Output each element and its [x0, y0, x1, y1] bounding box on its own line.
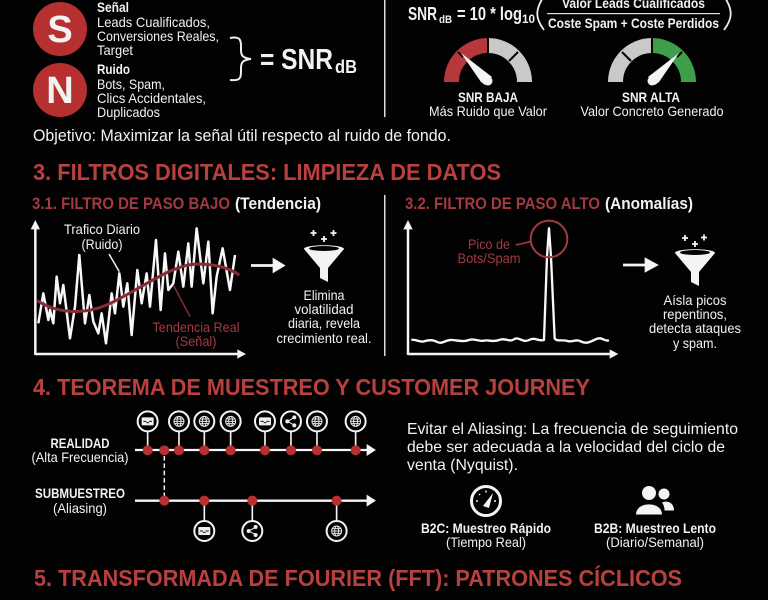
formula: dB — [439, 14, 452, 26]
gauge label: low SNR: SNR BAJA — [458, 89, 518, 105]
formula: 10 — [522, 12, 535, 26]
text: avoid aliasing: venta (Nyquist). — [407, 457, 518, 474]
icon: signal S circle: S — [47, 9, 73, 51]
formula: SNR — [408, 4, 437, 24]
chart: low-pass filter: Trafico Diario — [64, 221, 140, 237]
text: avoid aliasing: debe ser adecuada a la velocidad del ciclo de — [407, 439, 725, 456]
gauge label: low SNR — [429, 89, 547, 119]
text block: noise — [97, 61, 206, 120]
label: B2C: B2C: Muestreo Rápido — [421, 520, 551, 536]
label: undersampling — [35, 485, 125, 516]
timeline: undersampling — [135, 456, 376, 541]
label: B2C: (Tiempo Real) — [446, 534, 526, 550]
gauge: high SNR — [616, 36, 688, 86]
chart: high-pass filter — [403, 220, 618, 359]
heading: section 5: 5. TRANSFORMADA DE FOURIER (FFT): PATRONES CÍCLICOS — [34, 564, 682, 591]
formula: Coste Spam + Coste Perdidos — [548, 15, 719, 31]
label: reality: (Alta Frecuencia) — [32, 449, 128, 465]
text: avoid aliasing — [407, 421, 738, 474]
label: B2B — [594, 520, 716, 550]
label: B2B: B2B: Muestreo Lento — [594, 520, 716, 536]
gauge label: low SNR: Más Ruido que Valor — [429, 103, 547, 119]
chart: high-pass filter: Pico de — [468, 236, 510, 252]
subheading: 3.1: 3.1. FILTRO DE PASO BAJO — [32, 194, 230, 213]
chart: low-pass filter: (Ruido) — [82, 236, 122, 252]
label: reality — [32, 435, 128, 465]
text block: signal: Conversiones Reales, — [97, 28, 219, 44]
text block: noise: Bots, Spam, — [97, 76, 165, 92]
text block: noise: Clics Accidentales, — [97, 90, 206, 106]
gauge label: high SNR — [580, 89, 724, 119]
subheading: 3.1: (Tendencia) — [235, 194, 321, 213]
label: B2C — [421, 520, 551, 550]
subheading: 3.2: (Anomalías) — [605, 194, 693, 213]
objective text: Objetivo: Maximizar la señal útil respecto al ruido de fondo. — [33, 126, 451, 145]
text: low-pass description: diaria, revela — [288, 315, 360, 331]
icon: funnel high-pass — [675, 234, 715, 286]
highlight: spike circle — [531, 221, 567, 257]
text: low-pass description: crecimiento real. — [276, 330, 372, 346]
gauge label: high SNR: SNR ALTA — [622, 89, 680, 105]
text block: noise: Duplicados — [97, 104, 160, 120]
gauge label: high SNR: Valor Concreto Generado — [580, 103, 724, 119]
chart: low-pass filter: (Señal) — [176, 333, 216, 349]
chart: high-pass filter: Bots/Spam — [458, 250, 520, 266]
text: high-pass description: detecta ataques — [649, 320, 741, 336]
divider — [384, 195, 386, 356]
label: undersampling: SUBMUESTREO — [35, 485, 125, 501]
label: reality: REALIDAD — [50, 435, 110, 451]
line: daily traffic noise — [38, 228, 235, 343]
text: low-pass description — [276, 287, 372, 346]
text block: signal — [97, 0, 219, 58]
text block: signal: Leads Cualificados, — [97, 14, 210, 30]
heading: section 3: 3. FILTROS DIGITALES: LIMPIEZA DE DATOS — [33, 159, 501, 185]
text: low-pass description: Elimina — [304, 287, 345, 303]
line: flat traffic with spike — [411, 228, 609, 343]
axes: high-pass — [408, 227, 611, 355]
text: high-pass description: Aísla picos — [664, 292, 726, 308]
chart: low-pass filter: Tendencia Real — [152, 319, 240, 335]
divider — [384, 0, 386, 117]
icon: speedometer — [472, 486, 500, 516]
icon: people — [636, 486, 674, 514]
subheading: 3.2: 3.2. FILTRO DE PASO ALTO — [405, 194, 600, 213]
brace — [230, 37, 251, 80]
label: B2B: (Diario/Semanal) — [606, 534, 704, 550]
formula — [408, 0, 731, 31]
label: undersampling: (Aliasing) — [53, 500, 107, 516]
arrow: high-pass to funnel — [623, 260, 656, 270]
chart: low-pass filter — [31, 220, 246, 359]
text: high-pass description: y spam. — [673, 335, 717, 351]
text: high-pass description: repentinos, — [663, 306, 727, 322]
gauge: low SNR — [452, 36, 524, 86]
formula result: SNR dB: dB — [335, 57, 357, 77]
line: real trend signal — [37, 264, 239, 311]
text: avoid aliasing: Evitar el Aliasing: La frecuencia de seguimiento — [407, 421, 738, 438]
arrow: low-pass to funnel — [251, 260, 283, 271]
icon: noise N circle — [33, 63, 87, 117]
timeline: reality — [135, 411, 376, 456]
text block: noise: Ruido — [97, 61, 130, 77]
icon: signal S circle — [33, 2, 87, 56]
formula: = 10 * log — [457, 4, 522, 24]
icon: noise N circle: N — [46, 70, 74, 112]
heading: section 4: 4. TEOREMA DE MUESTREO Y CUSTOMER JOURNEY — [33, 374, 590, 400]
icon: funnel low-pass — [304, 230, 344, 282]
text: high-pass description — [649, 292, 741, 351]
text: low-pass description: volatilidad — [294, 301, 354, 317]
axes: low-pass — [35, 227, 238, 355]
text block: signal: Target — [97, 42, 133, 58]
formula result: SNR dB: = SNR — [260, 44, 333, 76]
